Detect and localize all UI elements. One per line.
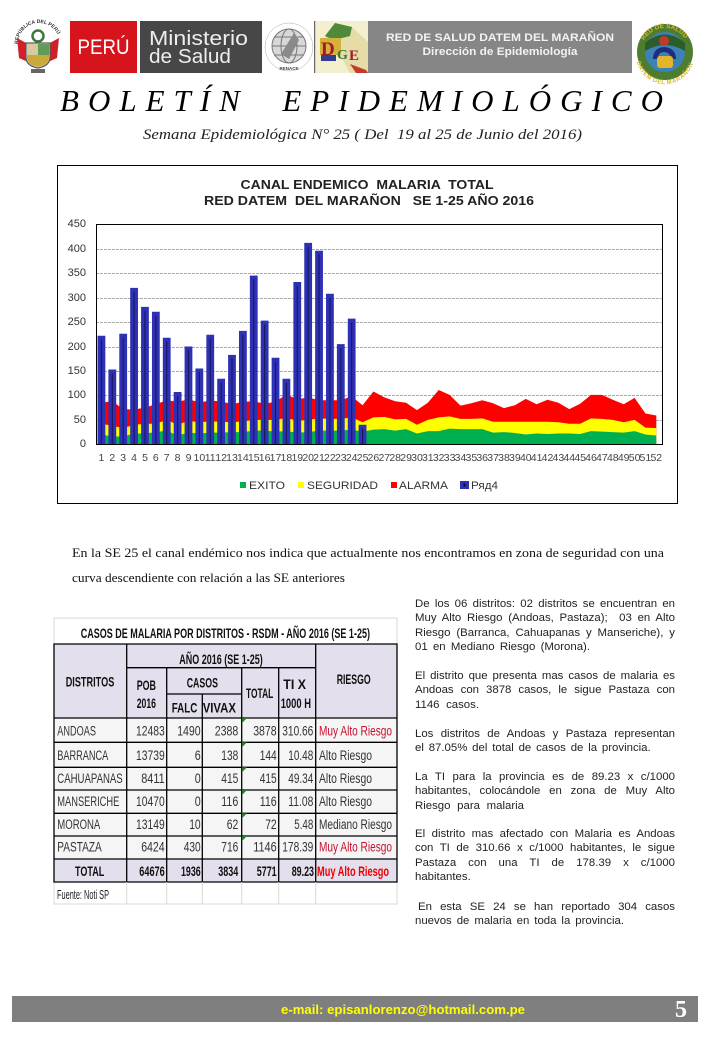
text block: district analysis: Muy Alto Riesgo (Andoas, Pastaza); 03 en Alto (415, 612, 675, 624)
table row: Barranca: Alto Riesgo (319, 748, 372, 763)
table row: total: 5771 (257, 863, 277, 879)
table row: Barranca: 13739 (136, 748, 165, 763)
x axis labels: 26 (368, 452, 379, 464)
text block: district analysis: el 87.05% del total de casos de la provincia. (415, 742, 651, 754)
area: SEGURIDAD (101, 416, 656, 444)
table row: Manseriche (57, 794, 372, 809)
icon: DGE map logo: G (337, 48, 348, 63)
panel: endemic channel chart (57, 165, 678, 504)
text block: district analysis: Los distritos de Andoas y Pastaza representan (415, 728, 675, 740)
table row: total: Muy Alto Riesgo (317, 863, 389, 879)
table row: Barranca: 6 (195, 748, 201, 763)
y axis labels (68, 218, 86, 450)
table row: Morona: 5.48 (294, 817, 313, 832)
table row: Morona (57, 817, 392, 832)
icon: Ministerio de Salud block: Ministerio (149, 28, 248, 50)
table row: Manseriche: 116 (221, 794, 238, 809)
text block: district analysis: con TI de 310.66 x c/1000 habitantes, le sigue (415, 842, 675, 854)
x axis labels: 5 (142, 452, 148, 464)
text block: chart interpretation: En la SE 25 el canal endémico nos indica que actualmente nos encontramos en zona de seguridad con una (72, 545, 664, 560)
table row: Pastaza: 6424 (141, 840, 165, 855)
table row: Barranca (57, 748, 372, 763)
x axis labels: 36 (476, 452, 488, 464)
table row: Manseriche: 10470 (136, 794, 165, 809)
table row: total: 64676 (139, 863, 165, 879)
text block: district analysis: habitantes, colocándole en zona de Muy Alto (415, 785, 675, 797)
table row: Pastaza: 430 (184, 840, 201, 855)
table row: Barranca: 144 (260, 748, 277, 763)
table row: Pastaza (57, 840, 392, 855)
table row: Cahuapanas: 49.34 (288, 771, 314, 786)
y axis labels: 50 (74, 414, 86, 426)
table row: Manseriche: MANSERICHE (57, 794, 119, 809)
table header labels: 1000 H (281, 695, 311, 711)
table title: CASOS DE MALARIA POR DISTRITOS - RSDM - AÑO 2016 (SE 1-25) (81, 624, 370, 641)
y axis labels: 100 (68, 389, 86, 401)
x axis labels: 31 (422, 452, 434, 464)
x axis labels: 13 (226, 452, 238, 464)
header title box: Dirección de Epidemiología (422, 46, 578, 58)
table row: total: 89.23 (292, 863, 314, 879)
table header labels: TI X (283, 676, 307, 692)
table row: Morona: 72 (265, 817, 277, 832)
chart legend: EXITO (249, 480, 285, 492)
chart legend: SEGURIDAD (307, 480, 378, 492)
bars: weekly cases (101, 243, 363, 444)
x axis labels: 29 (400, 452, 412, 464)
table row: Andoas: 12483 (136, 724, 165, 739)
x axis labels: 39 (509, 452, 521, 464)
table row: total: TOTAL (75, 863, 105, 879)
x axis labels: 44 (563, 452, 575, 464)
table header labels: 2016 (137, 695, 156, 711)
table header labels: TOTAL (246, 685, 274, 701)
x axis labels: 51 (640, 452, 651, 464)
x axis labels: 52 (650, 452, 662, 464)
x axis labels: 25 (357, 452, 369, 464)
x axis labels: 16 (259, 452, 271, 464)
x axis labels: 7 (164, 452, 170, 464)
x axis labels: 45 (574, 452, 586, 464)
x axis labels: 27 (378, 452, 390, 464)
title: BOLETÍN EPIDEMIOLÓGICO (60, 83, 663, 118)
x axis labels: 8 (175, 452, 181, 464)
icon: Ministerio de Salud block (140, 21, 262, 73)
x axis labels: 4 (131, 452, 137, 464)
icon: Perú red block (70, 21, 137, 73)
chart title: RED DATEM DEL MARAÑON SE 1-25 AÑO 2016 (204, 193, 534, 208)
x axis labels: 22 (324, 452, 336, 464)
header title box: RED DE SALUD DATEM DEL MARAÑON (386, 31, 614, 44)
table header labels: DISTRITOS (66, 674, 114, 690)
text block: district analysis (415, 598, 675, 927)
y axis labels: 400 (68, 243, 86, 255)
x axis labels: 46 (585, 452, 597, 464)
table row: Manseriche: 11.08 (288, 794, 313, 809)
text block: chart interpretation (72, 545, 664, 585)
icon: coat of arms of Peru: REPÚBLICA DEL PERÚ (14, 20, 61, 44)
table row: Barranca: BARRANCA (57, 748, 108, 763)
table header labels: AÑO 2016 (SE 1-25) (179, 650, 263, 667)
icon: DGE map logo: E (349, 48, 359, 64)
table row: Andoas: 310.66 (282, 724, 313, 739)
x axis labels: 2 (109, 452, 115, 464)
area: ALARMA (101, 390, 656, 444)
icon: Red de Salud Datem del Marañon seal: DATEM DEL MARAÑON (636, 61, 693, 84)
table row: Pastaza: 178.39 (282, 840, 313, 855)
stacked area bands (101, 243, 656, 444)
text block: district analysis: Riesgo para malaria (415, 800, 524, 812)
text block: district analysis: 1146 casos. (415, 699, 479, 711)
x axis labels: 18 (281, 452, 292, 464)
header title box (368, 21, 632, 73)
x axis labels: 35 (466, 452, 477, 464)
x axis labels: 19 (291, 452, 303, 464)
y axis labels: 300 (68, 292, 86, 304)
icon: Red de Salud Datem del Marañon seal (636, 24, 693, 84)
chart legend: ALARMA (399, 480, 449, 492)
table header labels: VIVAX (203, 699, 237, 715)
green cell markers (242, 718, 247, 841)
icon: DGE map logo: D (321, 39, 335, 60)
table row: Barranca: 138 (221, 748, 238, 763)
table row: total: 3834 (218, 863, 238, 879)
table row: Morona: MORONA (57, 817, 100, 832)
x axis labels: 21 (313, 452, 325, 464)
table row: total (75, 863, 389, 879)
table row: Morona: 10 (189, 817, 201, 832)
text block: district analysis: Riesgo (Barranca, Cahuapanas y Manseriche), y (415, 627, 675, 639)
header band with logos (14, 20, 693, 84)
text block: district analysis: habitantes. (415, 871, 471, 883)
table row: Andoas: 1490 (177, 724, 201, 739)
x axis labels: 6 (153, 452, 159, 464)
y axis labels: 200 (68, 341, 86, 353)
footer email: e-mail: episanlorenzo@hotmail.com.pe (281, 1003, 525, 1017)
panel: malaria cases by district table (53, 618, 398, 904)
chart title: CANAL ENDEMICO MALARIA TOTAL (240, 178, 494, 192)
x axis labels: 1 (98, 452, 104, 464)
table row: total: 1936 (181, 863, 201, 879)
table row: Andoas: Muy Alto Riesgo (319, 724, 392, 739)
y axis labels: 250 (68, 316, 86, 328)
table row: Andoas (57, 724, 392, 739)
icon: Ministerio de Salud block: de Salud (149, 46, 231, 68)
text block: district analysis: El distrito que presenta mas casos de malaria es (415, 670, 675, 682)
table row: Andoas: 3878 (253, 724, 277, 739)
x axis labels (98, 452, 662, 464)
y axis labels: 350 (68, 267, 86, 279)
table row: Cahuapanas (57, 771, 372, 786)
x axis labels: 30 (411, 452, 423, 464)
x axis labels: 12 (215, 452, 227, 464)
icon: coat of arms of Peru (14, 20, 61, 73)
x axis labels: 28 (389, 452, 401, 464)
x axis labels: 38 (498, 452, 510, 464)
x axis labels: 32 (433, 452, 445, 464)
table row: Morona: Mediano Riesgo (319, 817, 392, 832)
text block: district analysis: 01 en Mediano Riesgo (Morona). (415, 641, 590, 653)
text block: district analysis: nuevos de malaria en toda la provincia. (415, 915, 624, 927)
icon: Red de Salud Datem del Marañon seal: RED DE SALUD (640, 24, 688, 40)
table row: Manseriche: Alto Riesgo (319, 794, 372, 809)
x axis labels: 40 (520, 452, 532, 464)
x axis labels: 20 (302, 452, 314, 464)
x axis labels: 17 (270, 452, 281, 464)
x axis labels: 23 (335, 452, 347, 464)
table row: Andoas: ANDOAS (57, 724, 96, 739)
x axis labels: 43 (553, 452, 564, 464)
page number: 5 (675, 997, 687, 1023)
y axis labels: 450 (68, 218, 86, 230)
x axis labels: 33 (444, 452, 456, 464)
table row: Manseriche: 0 (195, 794, 201, 809)
table row: Manseriche: 116 (260, 794, 277, 809)
table row: Morona: 62 (227, 817, 238, 832)
icon: DGE map logo (314, 21, 368, 73)
table header labels (66, 650, 371, 715)
title (60, 83, 663, 143)
text block: district analysis: De los 06 distritos: 02 distritos se encuentran en (415, 598, 675, 610)
chart title (204, 178, 534, 208)
chart legend (240, 480, 498, 492)
y axis labels: 0 (80, 438, 86, 450)
y axis labels: 150 (68, 365, 86, 377)
table row: Cahuapanas: 415 (260, 771, 277, 786)
x axis labels: 15 (248, 452, 260, 464)
x axis labels: 10 (194, 452, 205, 464)
text block: district analysis: El distrito mas afectado con Malaria es Andoas (415, 828, 675, 840)
x axis labels: 14 (237, 452, 249, 464)
subtitle: Semana Epidemiológica N° 25 ( Del 19 al 25 de Junio del 2016) (143, 127, 582, 143)
icon: Perú red block: PERÚ (78, 36, 130, 59)
table header labels: RIESGO (337, 671, 371, 687)
footer bar (12, 996, 698, 1023)
text block: district analysis: En esta SE 24 se han reportado 304 casos (418, 901, 675, 913)
x axis labels: 42 (542, 452, 553, 464)
chart legend: Ряд4 (471, 480, 498, 492)
table row: Pastaza: PASTAZA (57, 840, 102, 855)
text block: chart interpretation: curva descendiente con relación a las SE anteriores (72, 570, 345, 585)
table row: Cahuapanas: Alto Riesgo (319, 771, 372, 786)
table row: Pastaza: 1146 (253, 840, 277, 855)
table source note: Fuente: Noti SP (57, 888, 109, 902)
table row: Barranca: 10.48 (288, 748, 313, 763)
x axis labels: 50 (629, 452, 641, 464)
x axis labels: 3 (120, 452, 126, 464)
text block: district analysis: Andoas con 3878 casos, le sigue Pastaza con (415, 684, 675, 696)
x axis labels: 47 (596, 452, 608, 464)
x axis labels: 24 (346, 452, 358, 464)
table row: Pastaza: Muy Alto Riesgo (319, 840, 392, 855)
x axis labels: 41 (531, 452, 543, 464)
table header labels: CASOS (187, 675, 218, 691)
icon: RENACE globe: RENACE (279, 66, 299, 71)
table row: Cahuapanas: 0 (195, 771, 201, 786)
table row: Cahuapanas: CAHUAPANAS (57, 771, 123, 786)
x axis labels: 11 (205, 452, 216, 464)
text block: district analysis: La TI para la provincia es de 89.23 x c/1000 (415, 771, 675, 783)
table row: Morona: 13149 (136, 817, 165, 832)
x axis labels: 9 (186, 452, 192, 464)
text block: district analysis: Pastaza con una TI de 178.39 x c/1000 (415, 857, 675, 869)
x axis labels: 49 (618, 452, 630, 464)
x axis labels: 48 (607, 452, 619, 464)
table row: Andoas: 2388 (215, 724, 238, 739)
table header labels: FALC (172, 699, 197, 715)
table row: Cahuapanas: 415 (221, 771, 238, 786)
area: EXITO (101, 429, 656, 444)
table row: Cahuapanas: 8411 (141, 771, 165, 786)
x axis labels: 34 (455, 452, 466, 464)
table row: Pastaza: 716 (221, 840, 238, 855)
icon: RENACE globe (265, 23, 313, 71)
x axis labels: 37 (487, 452, 499, 464)
table header labels: POB (137, 677, 156, 693)
